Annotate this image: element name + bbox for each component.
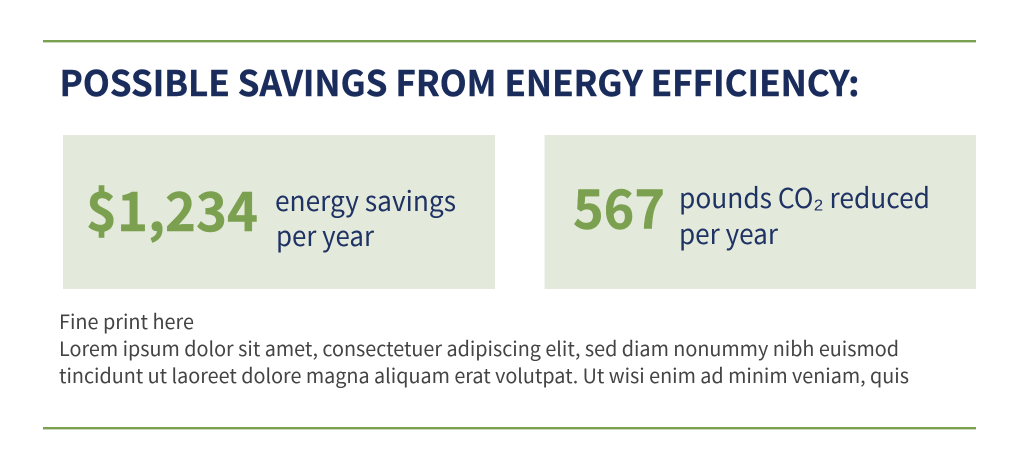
fine print: Lorem ipsum dolor sit amet, consectetuer adipiscing elit, sed diam nonummy nibh euismod <box>59 333 899 362</box>
label: energy savings per year: per year <box>276 214 374 254</box>
panel: CO2 reduced <box>544 135 976 289</box>
label: pounds CO2 reduced per year: pounds CO₂ reduced <box>679 176 930 216</box>
stat: pounds of CO2: 567 <box>573 166 665 244</box>
panel: energy savings <box>63 135 495 289</box>
stat: dollar savings: $1,234 <box>86 168 258 247</box>
label: pounds CO2 reduced per year <box>679 176 930 252</box>
label: pounds CO2 reduced per year: per year <box>679 212 778 252</box>
label: energy savings per year: energy savings <box>275 179 456 219</box>
label: energy savings per year <box>275 179 456 254</box>
fine print: tincidunt ut laoreet dolore magna aliquam erat volutpat. Ut wisi enim ad minim veniam, quis <box>59 360 909 389</box>
title: POSSIBLE SAVINGS FROM ENERGY EFFICIENCY: <box>60 56 860 107</box>
fine print: Fine print here <box>59 306 194 335</box>
fine print <box>59 306 909 389</box>
